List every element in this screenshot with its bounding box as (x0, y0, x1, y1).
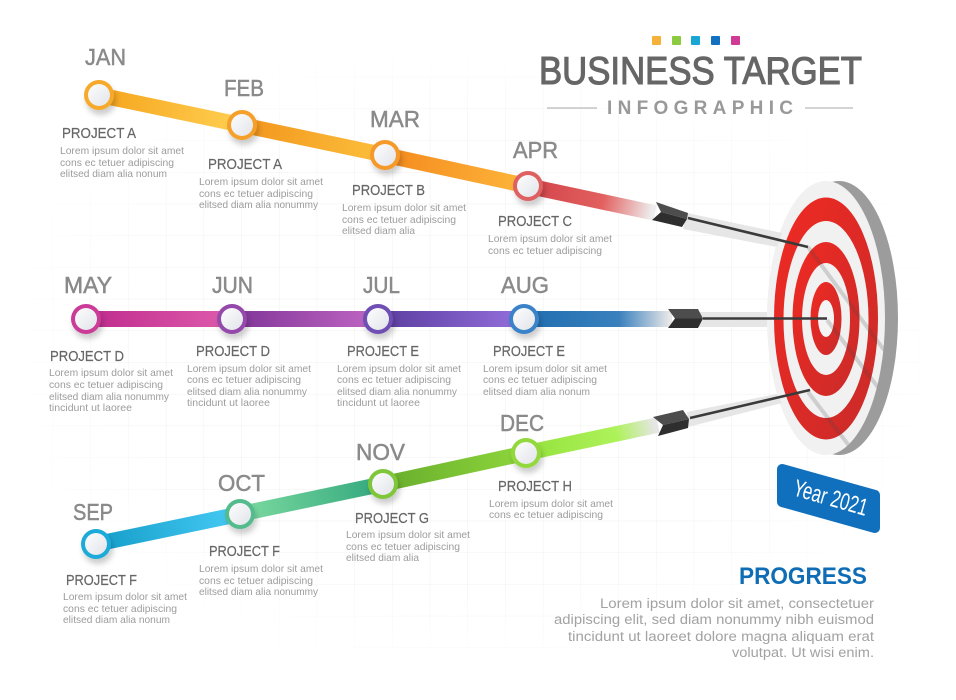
entry: February: Lorem ipsum dolor sit amet (199, 176, 323, 188)
timeline: Sep to Dec (96, 425, 658, 544)
entry: April (488, 137, 612, 257)
subheading: INFOGRAPHIC (607, 98, 793, 119)
entry: February: cons ec tetuer adipiscing (199, 188, 313, 200)
entry: February: PROJECT A (208, 157, 282, 173)
progress text: Lorem ipsum dolor sit amet, consectetuer (600, 596, 875, 611)
entry: May: MAY (64, 272, 112, 298)
entry: January (60, 44, 184, 180)
entry: May: PROJECT D (50, 349, 124, 365)
entry: June: PROJECT D (196, 344, 270, 360)
entry: August: Lorem ipsum dolor sit amet (483, 363, 607, 375)
entry: March: Lorem ipsum dolor sit amet (342, 202, 466, 214)
entry: July: elitsed diam alia nonummy (337, 386, 458, 398)
entry: May: cons ec tetuer adipiscing (49, 379, 163, 391)
timeline: May to Aug (86, 311, 672, 327)
progress text: adipiscing elit, sed diam nonummy nibh euismod (554, 612, 874, 627)
heading: BUSINESS TARGET (539, 50, 862, 93)
entry: April: Lorem ipsum dolor sit amet (488, 233, 612, 245)
entry: June: elitsed diam alia nonummy (187, 386, 308, 398)
entry: October: cons ec tetuer adipiscing (199, 575, 313, 587)
title block (539, 36, 862, 119)
entry: March (342, 106, 466, 237)
entry: November (346, 439, 470, 564)
arrow: middle (668, 309, 827, 328)
entry: May: elitsed diam alia nonummy (49, 391, 170, 403)
entry: May: tincidunt ut laoree (49, 402, 132, 414)
entry: November: cons ec tetuer adipiscing (346, 541, 460, 553)
entry: August: AUG (501, 272, 549, 298)
entry: January: cons ec tetuer adipiscing (60, 157, 174, 169)
entry: October: PROJECT F (209, 544, 280, 560)
timeline: Jan to Apr (99, 95, 655, 213)
entry: February: FEB (224, 75, 264, 101)
progress text: volutpat. Ut wisi enim. (732, 645, 874, 660)
entry: August: elitsed diam alia nonum (483, 386, 590, 398)
entry: December: Lorem ipsum dolor sit amet (489, 498, 613, 510)
entry: June: JUN (212, 272, 253, 298)
color squares (652, 36, 740, 45)
entry: June: cons ec tetuer adipiscing (187, 374, 301, 386)
entry: July: cons ec tetuer adipiscing (337, 374, 451, 386)
entry: April: APR (513, 137, 558, 163)
entry: January: Lorem ipsum dolor sit amet (60, 145, 184, 157)
entry: November: Lorem ipsum dolor sit amet (346, 529, 470, 541)
entry: September: SEP (73, 499, 113, 525)
arrow: bottom (653, 390, 810, 436)
entry: January: elitsed diam alia nonum (60, 168, 167, 180)
entry: July: tincidunt ut laoree (337, 397, 420, 409)
entry: May: Lorem ipsum dolor sit amet (49, 367, 173, 379)
entry: December: cons ec tetuer adipiscing (489, 509, 603, 521)
entry: July (337, 272, 461, 409)
progress heading: PROGRESS (739, 563, 867, 590)
entry: July: PROJECT E (347, 344, 419, 360)
entry: June (187, 272, 311, 409)
entry: July: Lorem ipsum dolor sit amet (337, 363, 461, 375)
nodes (71, 80, 543, 559)
entry: April: PROJECT C (498, 214, 572, 230)
entry: July: JUL (363, 272, 400, 298)
entry: March: elitsed diam alia (342, 225, 415, 237)
entry: November: NOV (356, 439, 406, 465)
entry: May (49, 272, 173, 414)
entry: February: elitsed diam alia nonummy (199, 199, 319, 211)
entry: January: JAN (85, 44, 126, 70)
entry: August: PROJECT E (493, 344, 565, 360)
entry: March: MAR (370, 106, 420, 132)
entry: September: Lorem ipsum dolor sit amet (63, 591, 187, 603)
entry: March: PROJECT B (352, 183, 425, 199)
entry: September (63, 499, 187, 626)
entry: February (199, 75, 323, 211)
entry: October: Lorem ipsum dolor sit amet (199, 563, 323, 575)
progress text (554, 596, 875, 660)
entry: December: DEC (500, 410, 544, 436)
year badge (782, 469, 875, 528)
entry: December: PROJECT H (498, 479, 572, 495)
arrow: top (652, 202, 808, 247)
entry: September: cons ec tetuer adipiscing (63, 603, 177, 615)
year badge: Year 2021 (790, 475, 871, 522)
entry: December (489, 410, 613, 521)
entry: November: PROJECT G (355, 511, 429, 527)
entry: April: cons ec tetuer adipiscing (488, 245, 602, 257)
entry: January: PROJECT A (62, 126, 136, 142)
entry: September: elitsed diam alia nonum (63, 614, 170, 626)
entry: August: cons ec tetuer adipiscing (483, 374, 597, 386)
entry: June: tincidunt ut laoree (187, 397, 270, 409)
entry: October: elitsed diam alia nonummy (199, 586, 319, 598)
target (767, 181, 898, 455)
entry: September: PROJECT F (66, 573, 137, 589)
entry: October: OCT (218, 470, 265, 496)
entry: August (483, 272, 607, 398)
entry: November: elitsed diam alia (346, 552, 419, 564)
entry: October (199, 470, 323, 598)
entry: March: cons ec tetuer adipiscing (342, 214, 456, 226)
progress text: tincidunt ut laoreet dolore magna aliquam erat (568, 629, 874, 644)
entry: June: Lorem ipsum dolor sit amet (187, 363, 311, 375)
